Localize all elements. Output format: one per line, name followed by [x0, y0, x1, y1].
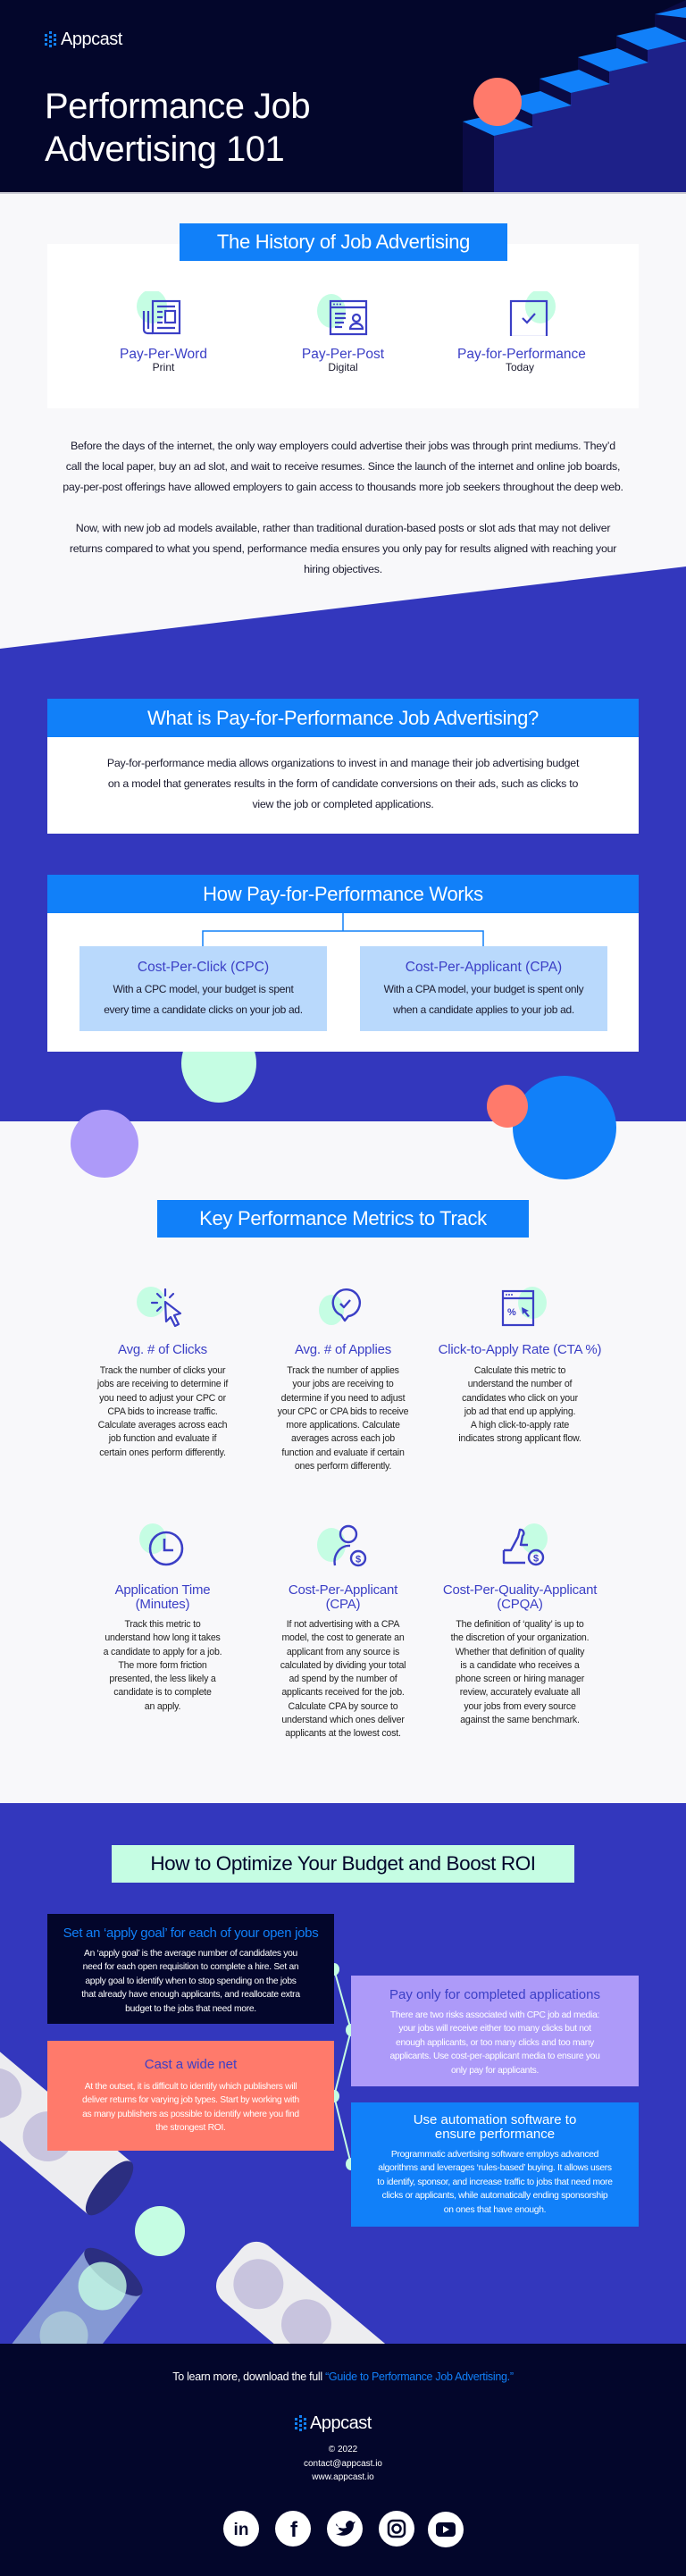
box: cast a wide net: as many publishers as possible to identify where you find: [82, 2110, 299, 2119]
box: pay only for completed applications: only pay for applicants.: [451, 2066, 539, 2076]
heading: what is: What is Pay-for-Performance Job Advertising?: [147, 706, 539, 729]
text block: history paragraphs: call the local paper, buy an ad slot, and wait to receive resumes. Since the launch of the internet and online job boards,: [66, 460, 620, 473]
metric: application time: (Minutes): [136, 1597, 189, 1612]
social icons: [223, 2511, 464, 2547]
box: CPC: [79, 946, 327, 1031]
text: your jobs from every source: [464, 1701, 576, 1712]
metric: CPA: [280, 1524, 406, 1739]
contact info: [304, 2445, 382, 2482]
box: CPA: when a candidate applies to your job ad.: [393, 1003, 574, 1016]
metric: click-to-apply rate: job ad that end up applying.: [464, 1406, 575, 1417]
icon: cursor click: [137, 1287, 182, 1328]
text: candidate is to complete: [113, 1687, 212, 1698]
item: pay-for-performance: Today: [506, 361, 534, 373]
box: automation software: ensure performance: [435, 2127, 555, 2142]
connector lines: [202, 913, 484, 946]
item: pay-for-performance: Pay-for-Performance: [457, 347, 586, 362]
icon: speech check: [319, 1288, 361, 1325]
header background: [0, 0, 686, 192]
metric: click-to-apply rate: understand the number of: [468, 1379, 572, 1389]
metric: application time: presented, the less likely a: [109, 1674, 216, 1684]
item: pay-per-word: Print: [153, 361, 174, 373]
metric: CPA: If not advertising with a CPA: [287, 1619, 399, 1630]
box: CPA: [360, 946, 607, 1031]
icon: person dollar: $: [356, 1555, 361, 1565]
box: cast a wide net: deliver returns for varying job types. Start by working with: [82, 2095, 299, 2105]
box: CPA: With a CPA model, your budget is spent only: [384, 983, 583, 995]
metric: avg applies: Avg. # of Applies: [295, 1342, 391, 1357]
stairs illustration: [463, 0, 686, 192]
metric: avg clicks: [96, 1287, 229, 1458]
box: apply goal: apply goal to identify when to stop spending on the jobs: [85, 1976, 297, 1986]
coral ball: [473, 78, 522, 126]
logo: Appcast: [61, 29, 122, 49]
text block: history paragraphs: Before the days of the internet, the only way employers could advertise their jobs was through print mediums. They’d: [71, 440, 615, 452]
icon: thumbs up dollar: [502, 1523, 548, 1565]
metric: CPQA: is a candidate who receives a: [460, 1660, 580, 1671]
metric: application time: [104, 1523, 222, 1712]
text: job function and evaluate if: [109, 1433, 216, 1444]
box: pay only for completed applications: Pay only for completed applications: [389, 1987, 600, 2002]
metric: avg applies: Track the number of applies: [287, 1365, 399, 1376]
metric: application time: Application Time: [115, 1582, 210, 1598]
metric: application time: understand how long it takes: [105, 1632, 221, 1643]
box: cast a wide net: Cast a wide net: [145, 2057, 237, 2072]
metric: CPA: calculated by dividing your total: [280, 1660, 406, 1671]
panel: what is pay-for-performance: [47, 699, 639, 834]
metric: click-to-apply rate: candidates who click on your: [462, 1393, 578, 1404]
panel: how pay-for-performance works: [47, 875, 639, 1052]
metric: click-to-apply rate: Click-to-Apply Rate (CTA %): [439, 1342, 601, 1357]
box: pay only for completed applications: [351, 1976, 639, 2086]
metric: CPQA: [443, 1523, 597, 1725]
text: ones perform differently.: [295, 1461, 391, 1472]
metric: CPQA: Cost-Per-Quality-Applicant: [443, 1582, 597, 1598]
ROI section background: [0, 1803, 686, 2344]
box: cast a wide net: [47, 2041, 334, 2151]
box: CPC: every time a candidate clicks on your job ad.: [104, 1003, 303, 1016]
contact info: contact@appcast.io: [304, 2459, 382, 2468]
heading: what is: [47, 699, 639, 737]
box: pay only for completed applications: applicants. Use cost-per-applicant media to ensure you: [389, 2052, 600, 2061]
heading: optimize budget: How to Optimize Your Budget and Boost ROI: [150, 1852, 536, 1875]
blue section background: [0, 566, 686, 1121]
title: Advertising 101: [45, 130, 284, 169]
metric: CPA: ad spend by the number of: [289, 1674, 397, 1684]
icon: person dollar: [317, 1524, 366, 1567]
footer: [0, 2344, 686, 2576]
box: automation software: algorithms and leverages ‘rules-based’ buying. It allows users: [378, 2163, 612, 2173]
icon: browser percent: %: [507, 1307, 516, 1318]
box: pay only for completed applications: There are two risks associated with CPC job ad media:: [390, 2010, 599, 2020]
definition text: Pay-for-performance media allows organizations to invest in and manage their job advertising budget: [107, 757, 579, 769]
text: applicants at the lowest cost.: [285, 1728, 401, 1739]
item: pay-per-post: [302, 294, 384, 373]
text: review, accurately evaluate all: [460, 1687, 580, 1698]
title: [45, 87, 310, 169]
metric: avg applies: more applications. Calculate: [286, 1420, 400, 1431]
metric: avg applies: your jobs are receiving to: [292, 1379, 394, 1389]
box: CPA: Cost-Per-Applicant (CPA): [406, 960, 562, 975]
social icons: in: [234, 2521, 248, 2539]
box: apply goal: that already have enough applicants, and reallocate extra: [81, 1990, 300, 2000]
definition text: on a model that generates results in the form of candidate conversions on their ads, such as clicks to: [108, 777, 578, 790]
cta text: To learn more, download the full “Guide to Performance Job Advertising.”: [172, 2370, 514, 2383]
contact info: www.appcast.io: [312, 2472, 374, 2482]
box: automation software: on ones that have enough.: [444, 2205, 546, 2215]
metric: avg clicks: Track the number of clicks your: [100, 1365, 225, 1376]
box: automation software: clicks or applicants, while automatically ending sponsorship: [382, 2191, 607, 2201]
item: pay-per-post: Digital: [328, 361, 358, 373]
heading: key performance metrics: [157, 1200, 529, 1238]
metric: CPQA: phone screen or hiring manager: [456, 1674, 584, 1684]
metric: application time: a candidate to apply for a job.: [104, 1647, 222, 1657]
metric: application time: The more form friction: [118, 1660, 207, 1671]
icon: thumbs up dollar: $: [533, 1553, 539, 1564]
metric: avg applies: averages across each job: [291, 1433, 395, 1444]
panel: history of job advertising: [120, 223, 586, 373]
metric: CPQA: the discretion of your organization.: [451, 1632, 589, 1643]
text block: history paragraphs: returns compared to what you spend, performance media ensures you only pay for results aligned with reaching your: [70, 542, 616, 555]
box: automation software: Use automation software to: [414, 2112, 576, 2127]
box: cast a wide net: the strongest ROI.: [155, 2123, 226, 2133]
icon: clock: [139, 1523, 184, 1565]
metric: avg clicks: CPA bids to increase traffic.: [107, 1406, 218, 1417]
box: apply goal: Set an ‘apply goal’ for each of your open jobs: [63, 1926, 318, 1941]
metric: CPA: applicant from any source is: [287, 1647, 399, 1657]
title: Performance Job: [45, 87, 310, 126]
metric: avg clicks: jobs are receiving to determine if: [97, 1379, 228, 1389]
metric: CPQA: The definition of ‘quality’ is up to: [456, 1619, 584, 1630]
box: cast a wide net: At the outset, it is difficult to identify which publishers will: [85, 2082, 297, 2092]
metric: avg applies: determine if you need to adjust: [281, 1393, 405, 1404]
metric: avg applies: [277, 1288, 409, 1472]
box: CPC: With a CPC model, your budget is spent: [113, 983, 294, 995]
metric: avg clicks: Calculate averages across each: [98, 1420, 227, 1431]
text: Calculate CPA by source to: [288, 1701, 397, 1712]
metric: avg clicks: Avg. # of Clicks: [118, 1342, 207, 1357]
heading: history: [180, 223, 507, 261]
metric: application time: Track this metric to: [124, 1619, 201, 1630]
metric: CPQA: (CPQA): [497, 1597, 543, 1612]
metric: click-to-apply rate: A high click-to-apply rate: [471, 1420, 569, 1431]
footer logo: Appcast: [310, 2413, 372, 2433]
metric: avg clicks: you need to adjust your CPC or: [99, 1393, 226, 1404]
metric: CPA: Cost-Per-Applicant: [289, 1582, 397, 1598]
social icons: f: [290, 2518, 298, 2542]
box: pay only for completed applications: your jobs will receive either too many clicks but not: [398, 2024, 591, 2034]
heading: optimize budget: [112, 1845, 574, 1883]
item: pay-per-word: Pay-Per-Word: [120, 347, 207, 362]
text: function and evaluate if certain: [281, 1447, 405, 1458]
metric: CPA: model, the cost to generate an: [281, 1632, 405, 1643]
text block: history paragraphs: hiring objectives.: [304, 563, 382, 575]
box: apply goal: budget to the jobs that need more.: [125, 2004, 256, 2014]
contact info: © 2022: [329, 2445, 357, 2454]
text: understand which ones deliver: [281, 1715, 405, 1725]
box: pay only for completed applications: enough applicants, or too many clicks and too many: [396, 2038, 594, 2048]
metric: CPQA: Whether that definition of quality: [456, 1647, 584, 1657]
heading: how works: [47, 875, 639, 913]
metric: CPA: (CPA): [326, 1597, 360, 1612]
heading: key performance metrics: Key Performance Metrics to Track: [199, 1207, 487, 1229]
metric: click-to-apply rate: Calculate this metric to: [474, 1365, 565, 1376]
box: automation software: [351, 2102, 639, 2227]
metric: click-to-apply rate: [439, 1287, 601, 1444]
text: indicates strong applicant flow.: [458, 1433, 581, 1444]
definition text: [107, 757, 579, 810]
text: certain ones perform differently.: [99, 1447, 226, 1458]
text: an apply.: [145, 1701, 180, 1712]
box: apply goal: [47, 1914, 334, 2024]
box: automation software: Programmatic advertising software employs advanced: [391, 2150, 598, 2160]
text: against the same benchmark.: [460, 1715, 580, 1725]
decorative circles: [71, 1052, 616, 1179]
icon: browser percent: [502, 1287, 547, 1326]
heading: history: The History of Job Advertising: [217, 231, 470, 253]
definition text: view the job or completed applications.: [252, 798, 434, 810]
item: pay-per-post: Pay-Per-Post: [302, 347, 384, 362]
item: pay-per-word: [120, 291, 207, 373]
heading: how works: How Pay-for-Performance Works: [203, 883, 483, 904]
text block: history paragraphs: pay-per-post offerings have allowed employers to gain access to thousands more job seekers throughout the deep web. Now, with new job ad models available, rather than traditional duration-based posts or slot ads that may not deliver: [63, 481, 623, 534]
decorative tubes: [0, 2052, 385, 2344]
box: apply goal: need for each open requisition to complete a hire. Set an: [83, 1962, 298, 1972]
connector: timeline: [334, 1963, 351, 2170]
metric: CPA: applicants received for the job.: [281, 1687, 405, 1698]
box: apply goal: An ‘apply goal’ is the average number of candidates you: [84, 1949, 297, 1959]
text block: history paragraphs: [63, 440, 623, 575]
metric: avg applies: your CPC or CPA bids to receive: [278, 1406, 408, 1417]
box: automation software: to identify, sponsor, and increase traffic to jobs that need more: [377, 2177, 613, 2187]
box: CPC: Cost-Per-Click (CPC): [138, 960, 269, 975]
item: pay-for-performance: [457, 291, 586, 373]
